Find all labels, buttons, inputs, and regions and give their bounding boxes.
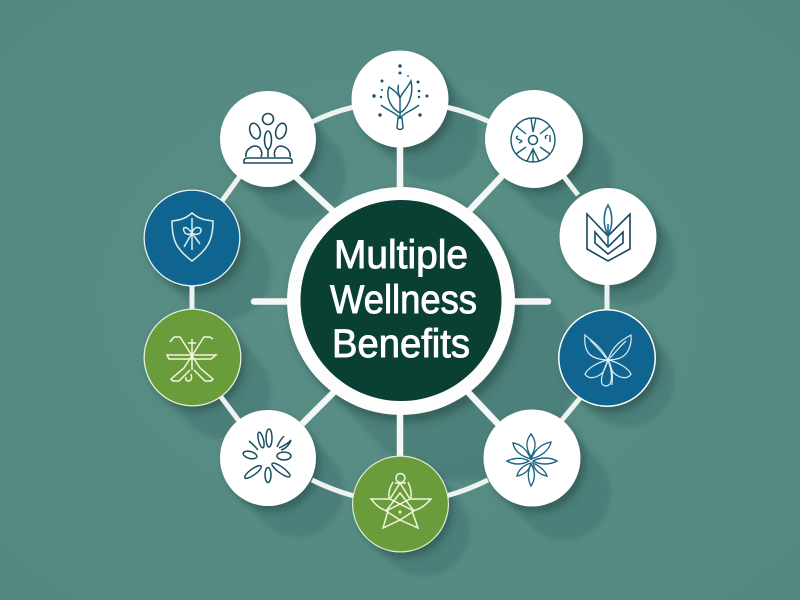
connector ring segments [192, 107, 607, 496]
hub title: Multiple [334, 233, 468, 277]
icon: seeds and plant [244, 114, 292, 163]
node: left, blue shield [144, 190, 240, 286]
hub title: Benefits [332, 322, 470, 366]
icon: meditating star figure [371, 474, 431, 528]
node: bottom left, white petals [220, 410, 316, 506]
icon: grain chevrons [587, 205, 630, 261]
node: top, leaf with dots [352, 50, 448, 148]
icon: butterfly flower [585, 335, 631, 386]
node: bottom, green star figure [352, 456, 449, 552]
icon: eight petal flower [507, 434, 557, 486]
node: lower left, green crossed paddles [144, 308, 242, 406]
hub title: Wellness [330, 278, 477, 322]
node: upper right, wheel [485, 90, 583, 188]
icon: petal burst [242, 429, 292, 482]
icon: sprouting leaf [372, 64, 428, 130]
icon: crossed paddles [167, 337, 216, 381]
node: bottom right, white flower [484, 410, 580, 506]
drop shadows [149, 57, 661, 557]
icon: shield with ribbon [172, 213, 213, 261]
connector spokes [254, 146, 548, 458]
node: right, wheat shield [560, 188, 656, 285]
node: upper left, seeds [220, 91, 316, 187]
long shadows [192, 99, 628, 530]
node: lower right, blue flower [558, 309, 656, 407]
icon: mandala wheel [511, 118, 555, 162]
hub title [330, 233, 477, 366]
central hub [287, 187, 515, 415]
